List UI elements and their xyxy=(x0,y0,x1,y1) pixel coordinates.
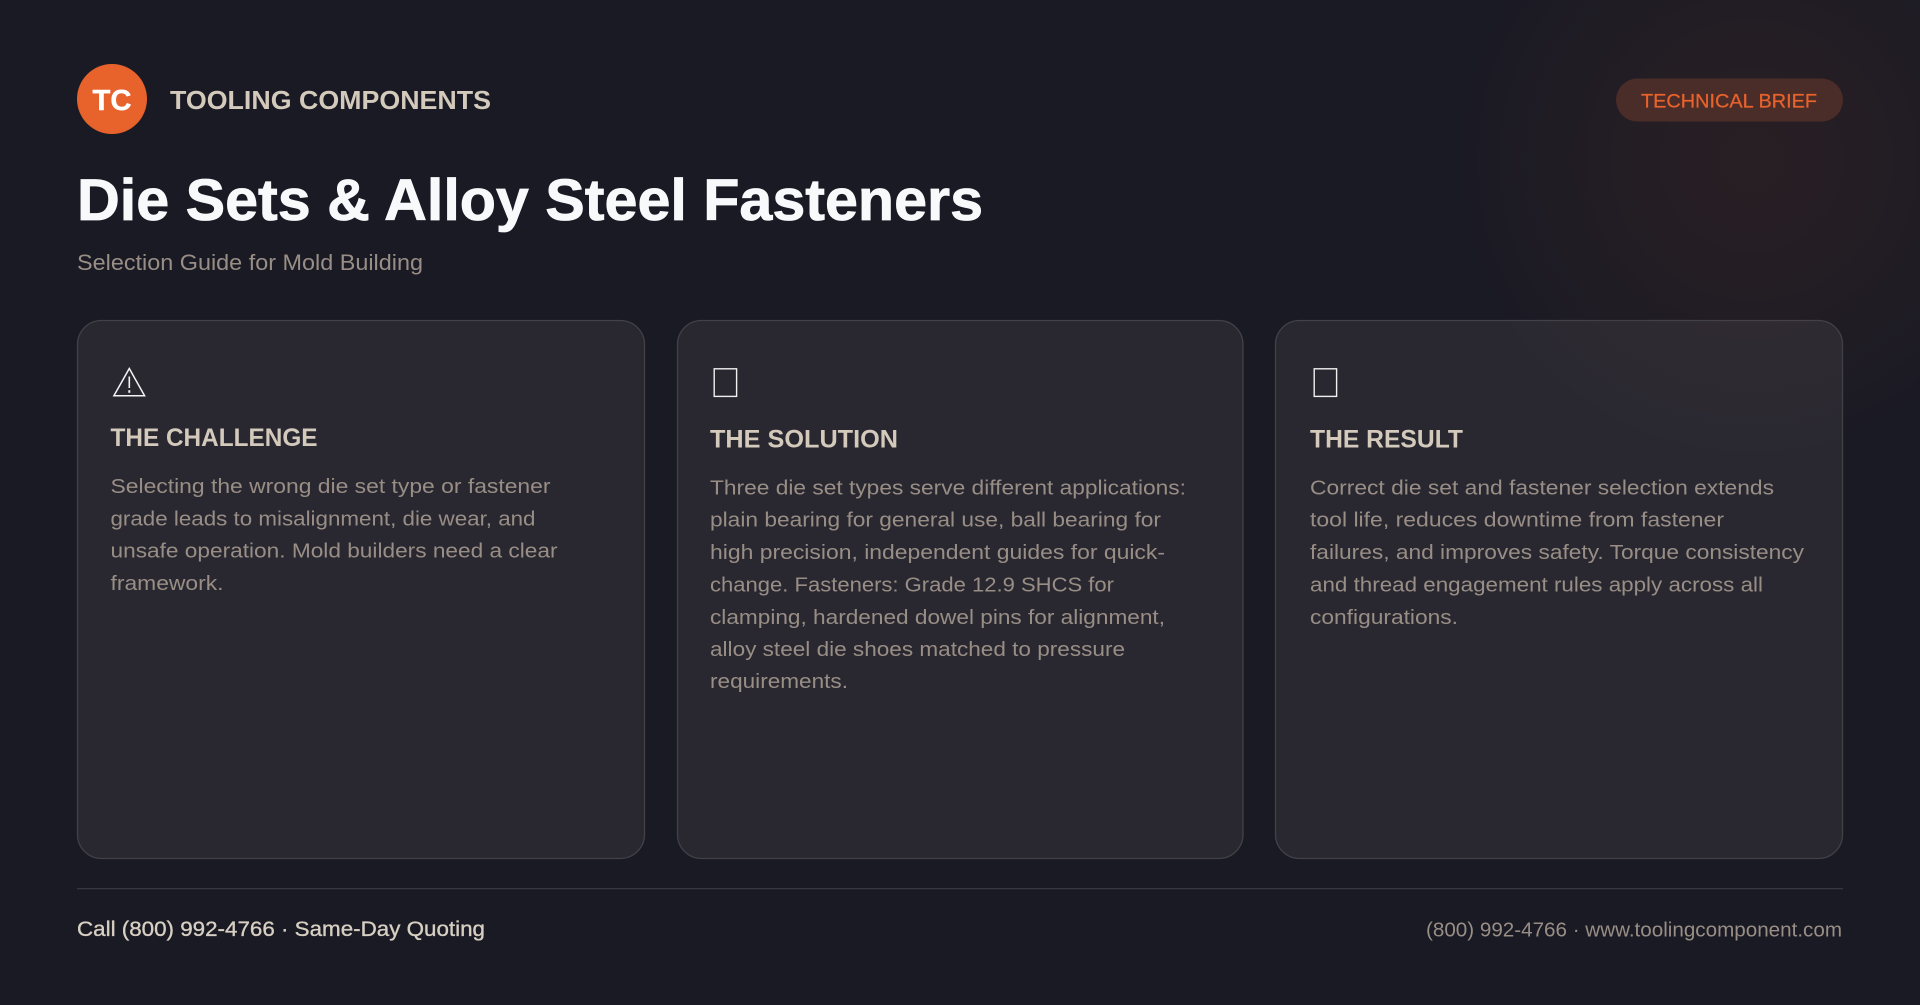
body text: alloy steel die shoes matched to pressure xyxy=(710,639,1125,661)
body text: unsafe operation. Mold builders need a clear xyxy=(110,540,558,562)
body text: grade leads to misalignment, die wear, and xyxy=(110,508,536,530)
body text xyxy=(1310,477,1805,629)
heading: THE CHALLENGE xyxy=(110,424,318,452)
body text xyxy=(110,476,558,595)
body text: configurations. xyxy=(1310,607,1458,629)
body text: clamping, hardened dowel pins for alignment, xyxy=(710,607,1165,629)
badge: technical brief xyxy=(1616,78,1843,122)
body text: high precision, independent guides for quick- xyxy=(710,542,1165,564)
title: Die Sets & Alloy Steel Fasteners xyxy=(77,168,983,233)
icon: missing glyph box xyxy=(1314,369,1337,396)
heading: THE SOLUTION xyxy=(710,426,898,454)
header logo: TC xyxy=(92,85,132,117)
body text: Correct die set and fastener selection extends xyxy=(1310,477,1774,499)
body text: Three die set types serve different applications: xyxy=(710,477,1186,499)
body text: framework. xyxy=(110,573,224,595)
body text: plain bearing for general use, ball bearing for xyxy=(710,510,1161,532)
icon: missing glyph box xyxy=(714,369,737,396)
body text: tool life, reduces downtime from fastener xyxy=(1310,510,1724,532)
subtitle: Selection Guide for Mold Building xyxy=(77,250,423,275)
panel: the challenge xyxy=(78,320,644,858)
body text: failures, and improves safety. Torque consistency xyxy=(1310,542,1805,564)
body text: and thread engagement rules apply across all xyxy=(1310,574,1763,596)
panel: the result xyxy=(1276,320,1842,858)
corner glow xyxy=(1400,0,1920,470)
body text: requirements. xyxy=(710,671,848,693)
heading: THE RESULT xyxy=(1310,426,1463,454)
footer contact details: (800) 992-4766 · www.toolingcomponent.com xyxy=(1426,920,1842,942)
brand name: TOOLING COMPONENTS xyxy=(170,85,491,115)
badge: technical brief: TECHNICAL BRIEF xyxy=(1641,90,1817,112)
icon: warning triangle xyxy=(114,368,145,396)
body text xyxy=(710,477,1186,693)
header logo xyxy=(77,64,147,134)
body text: change. Fasteners: Grade 12.9 SHCS for xyxy=(710,574,1114,596)
panel: the solution xyxy=(678,320,1243,858)
footer call to action: Call (800) 992-4766 · Same-Day Quoting xyxy=(77,918,485,941)
body text: Selecting the wrong die set type or fastener xyxy=(110,476,551,498)
